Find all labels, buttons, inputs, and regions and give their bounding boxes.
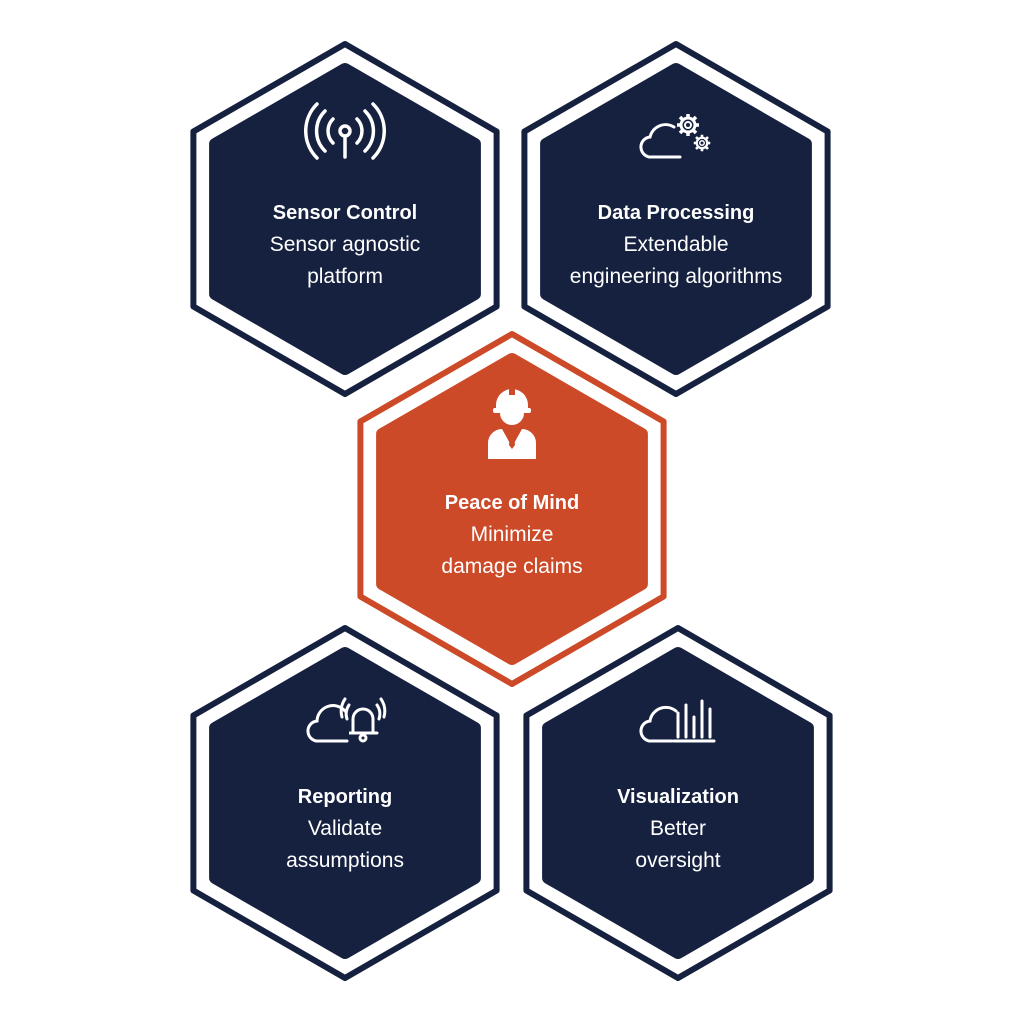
text: visualization desc: Better [650, 817, 706, 840]
text: reporting desc: assumptions [286, 849, 404, 872]
icon: cloud gears [641, 114, 710, 157]
icon: engineer with hard hat [488, 387, 536, 459]
text: sensor desc: Sensor agnostic [270, 233, 420, 256]
heading: Sensor Control: Sensor Control [273, 202, 417, 224]
text: processing desc: engineering algorithms [570, 265, 782, 288]
text: sensor desc: platform [307, 265, 383, 288]
heading: Peace of Mind: Peace of Mind [445, 492, 579, 514]
panel: visualization [526, 628, 830, 978]
text: visualization desc: oversight [635, 849, 721, 872]
panel: peace of mind [360, 334, 664, 684]
text: peace desc: damage claims [441, 555, 583, 578]
text: reporting desc: Validate [308, 817, 382, 840]
panel: reporting [193, 628, 497, 978]
heading: Data Processing: Data Processing [598, 202, 754, 224]
icon: antenna signal [306, 104, 384, 158]
heading: Visualization: Visualization [617, 786, 739, 808]
panel: sensor control [193, 44, 497, 394]
heading: Reporting: Reporting [298, 786, 392, 808]
panel: data processing [524, 44, 828, 394]
text: peace desc: Minimize [471, 523, 553, 546]
icon: cloud bell [308, 699, 385, 741]
icon: cloud bar chart [641, 701, 714, 741]
text: processing desc: Extendable [623, 233, 729, 256]
